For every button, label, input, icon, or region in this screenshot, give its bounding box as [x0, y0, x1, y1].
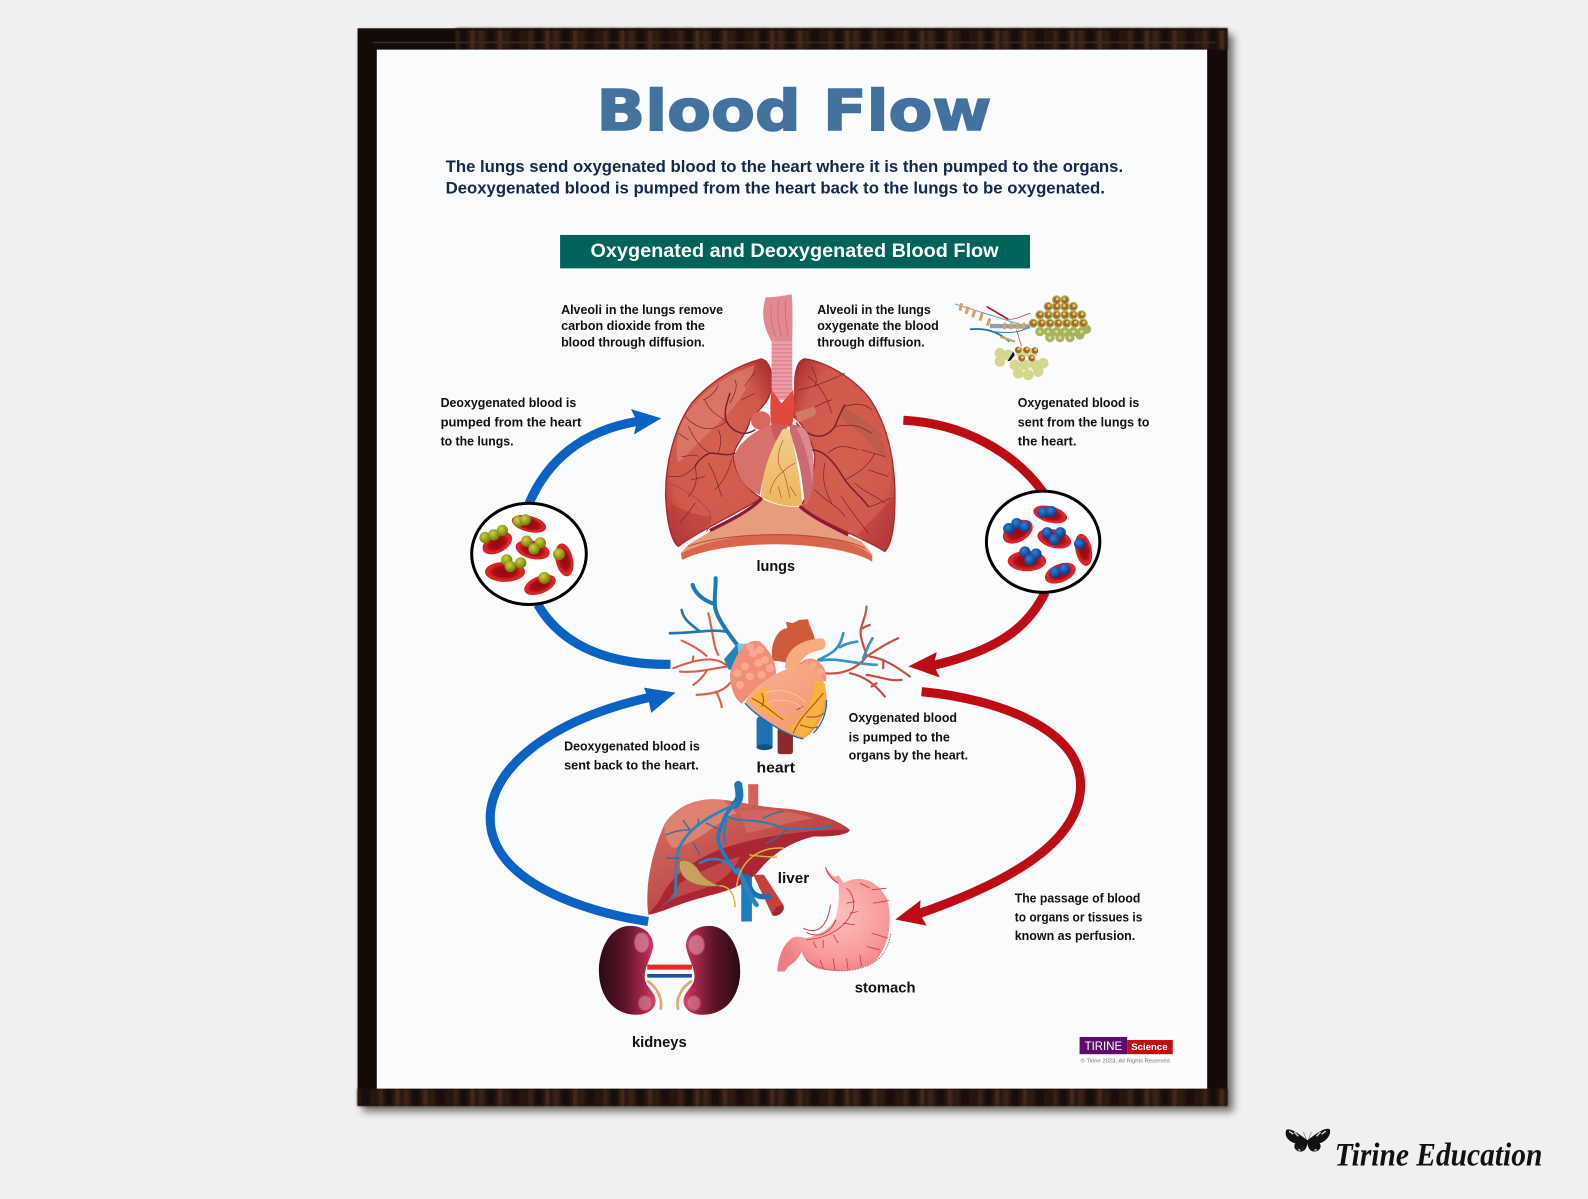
brand signature: Tirine Education	[1335, 1138, 1542, 1174]
text: alveoli remove carbon dioxide: Alveoli in the lungs remove	[561, 303, 723, 317]
heart within lungs	[734, 407, 816, 506]
organ: heart	[670, 578, 910, 754]
atria and great vessels	[724, 644, 747, 670]
text: oxygenated to heart: the heart.	[1018, 435, 1077, 449]
logo: Tirine Science	[1080, 1037, 1173, 1064]
text: perfusion: known as perfusion.	[1015, 929, 1135, 943]
label: heart: heart	[757, 761, 795, 777]
label: kidneys: kidneys	[632, 1035, 687, 1051]
arrow: red heart to organs	[895, 692, 1081, 926]
left kidney	[599, 926, 656, 1015]
left lung	[666, 359, 772, 546]
logo: Tirine Science: Science	[1131, 1042, 1168, 1053]
text: alveoli remove carbon dioxide: blood through diffusion.	[561, 335, 705, 349]
text: oxygenated to organs	[849, 711, 968, 763]
diaphragm	[681, 498, 872, 562]
text: oxygenated to organs: is pumped to the	[849, 730, 950, 744]
liver body	[647, 799, 850, 915]
title: Blood Flow	[597, 79, 991, 144]
lung highlights	[670, 365, 894, 551]
text: oxygenated to heart	[1018, 396, 1150, 449]
right kidney	[683, 926, 740, 1015]
text: deoxygenated back to heart	[564, 739, 700, 773]
text: alveoli remove carbon dioxide: carbon dioxide from the	[561, 319, 705, 333]
logo: Tirine Science: © Tirine 2023. All Rights Reserved	[1081, 1057, 1170, 1064]
text: oxygenated to heart: Oxygenated blood is	[1018, 396, 1139, 410]
organ: kidneys	[599, 926, 740, 1015]
text: perfusion	[1015, 891, 1142, 943]
text: deoxygenated to lungs: to the lungs.	[441, 435, 513, 449]
heart vessels	[670, 578, 910, 707]
text: alveoli oxygenate: oxygenate the blood	[817, 319, 939, 333]
icon: deoxygenated blood cells	[472, 503, 586, 605]
text: alveoli remove carbon dioxide	[561, 303, 723, 349]
arrow: red lungs to heart	[903, 420, 1045, 677]
text: alveoli oxygenate	[817, 303, 939, 349]
label: stomach: stomach	[855, 980, 916, 996]
lung vessels	[668, 367, 892, 533]
organ: stomach	[777, 867, 891, 971]
text: deoxygenated to lungs	[441, 396, 582, 449]
text: alveoli oxygenate: through diffusion.	[817, 335, 925, 349]
organ: liver	[647, 784, 850, 921]
text: deoxygenated back to heart: Deoxygenated blood is	[564, 739, 700, 753]
icon: butterfly	[1286, 1129, 1330, 1152]
trachea	[763, 294, 795, 427]
arrow: blue heart to lungs	[529, 409, 670, 664]
text: perfusion: The passage of blood	[1015, 891, 1140, 905]
text: alveoli oxygenate: Alveoli in the lungs	[817, 303, 931, 317]
intro text	[446, 157, 1123, 197]
section banner: Oxygenated and Deoxygenated Blood Flow	[590, 240, 999, 262]
section banner	[560, 235, 1030, 268]
organ: alveoli	[955, 299, 1087, 375]
text: perfusion: to organs or tissues is	[1015, 911, 1142, 925]
lung base shadow	[710, 498, 848, 535]
text: deoxygenated to lungs: pumped from the heart	[441, 415, 582, 429]
logo: Tirine Science: TIRINE	[1085, 1039, 1122, 1053]
text: oxygenated to organs: organs by the heart.	[849, 749, 968, 763]
arrow: blue organs to heart	[490, 688, 676, 922]
organ: lungs	[666, 294, 895, 562]
text: oxygenated to heart: sent from the lungs to	[1018, 415, 1150, 429]
right lung	[793, 359, 895, 551]
intro text: The lungs send oxygenated blood to the heart where it is then pumped to the organs.	[446, 157, 1123, 176]
label: liver: liver	[778, 871, 809, 887]
text: oxygenated to organs: Oxygenated blood	[849, 711, 957, 725]
gallbladder	[679, 860, 720, 886]
label: lungs: lungs	[757, 559, 795, 575]
icon: oxygenated blood cells	[986, 491, 1100, 592]
intro text: Deoxygenated blood is pumped from the heart back to the lungs to be oxygenated.	[446, 178, 1105, 197]
picture frame	[358, 28, 1233, 1112]
text: deoxygenated to lungs: Deoxygenated blood is	[441, 396, 576, 410]
text: deoxygenated back to heart: sent back to the heart.	[564, 759, 699, 773]
liver veins	[663, 785, 830, 921]
